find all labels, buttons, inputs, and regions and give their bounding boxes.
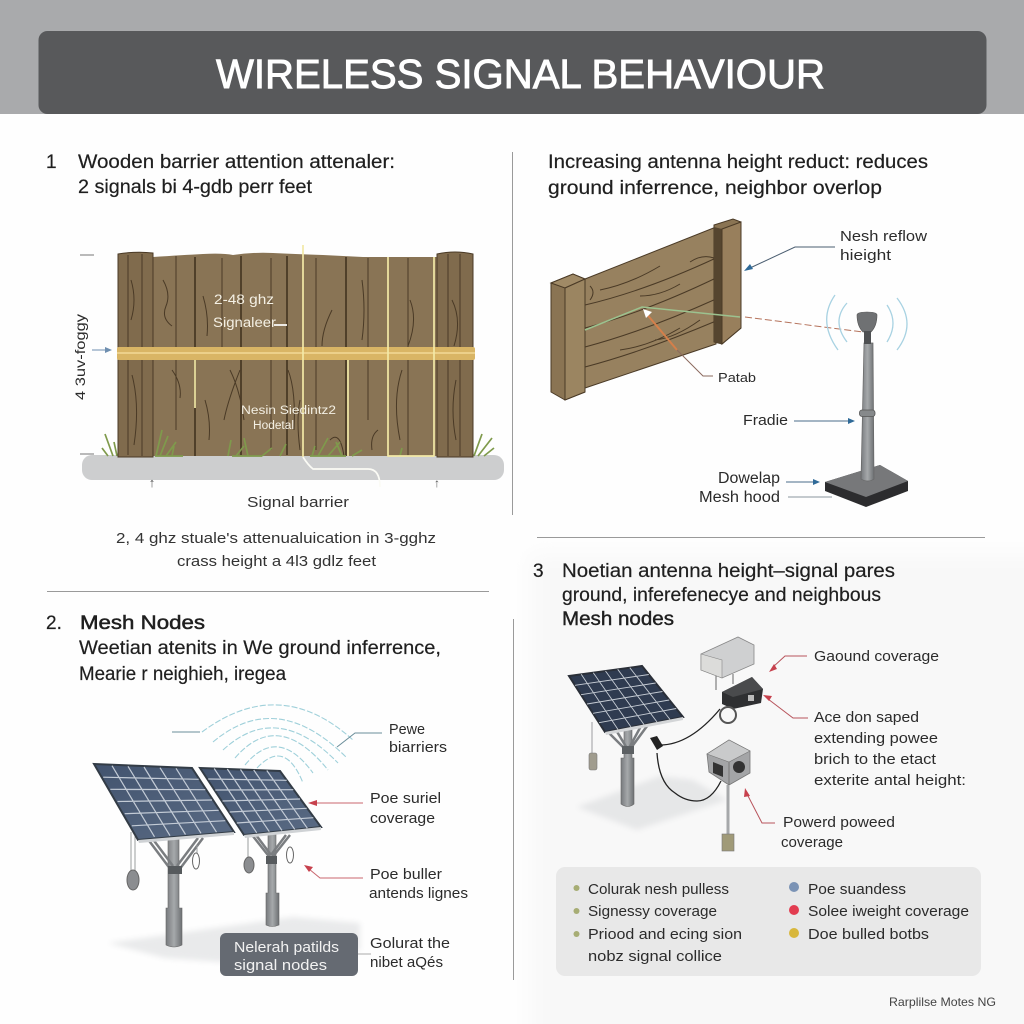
header band — [0, 0, 1024, 114]
right solar panel — [200, 768, 321, 835]
solar panel — [569, 666, 683, 732]
fence labels: 2-48 ghz — [214, 292, 274, 307]
fence illustration: ↑ — [149, 475, 155, 490]
section 4 heading — [533, 561, 895, 630]
solar power kit illustration: Ace don saped — [814, 709, 919, 726]
grass — [102, 430, 494, 456]
section 3 heading (lower left): Mearie r neighieh, iregea — [79, 664, 286, 685]
fence illustration: Nesin Siedintz2 — [241, 405, 336, 417]
twin solar node illustration: Poe suriel — [370, 791, 441, 807]
twin solar node illustration: Poe buller — [370, 867, 442, 883]
angled wall and antenna illustration: Fradie — [743, 412, 788, 429]
solar power kit illustration — [569, 637, 966, 851]
legend left column: nobz signal collice — [588, 948, 722, 965]
section 1 heading — [46, 152, 395, 198]
twin solar node illustration: coverage — [370, 811, 435, 827]
wall left post — [551, 274, 585, 400]
fence illustration: 4 3uv-foggy — [72, 314, 88, 400]
legend left column: Priood and ecing sion — [588, 926, 742, 943]
fence illustration: Signaleer — [213, 315, 277, 330]
twin solar node illustration: antends lignes — [369, 886, 468, 902]
wifi arcs — [202, 705, 353, 783]
legend left column — [574, 881, 742, 965]
red callouts — [773, 656, 807, 667]
twin solar node illustration: biarriers — [389, 740, 447, 756]
height dimension — [80, 255, 94, 454]
grey box — [701, 637, 754, 678]
wall right post — [714, 219, 741, 344]
signal paths — [585, 307, 740, 330]
dark label box: Nelerah patilds — [234, 939, 339, 956]
signal lines — [195, 245, 434, 487]
section 2 heading (top right): Increasing antenna height reduct: reduces — [548, 152, 928, 173]
left post — [118, 252, 153, 457]
wall — [585, 227, 716, 388]
solar power kit illustration: coverage — [781, 834, 843, 851]
callout arrow — [750, 247, 835, 268]
fence illustration: ↑ — [434, 476, 440, 490]
angled wall and antenna illustration: Dowelap — [718, 470, 780, 487]
section 1 heading: 2 signals bi 4-gdb perr feet — [78, 177, 313, 198]
legend panel — [556, 867, 981, 976]
node left pole — [166, 838, 182, 947]
ground strip — [82, 455, 504, 480]
antenna pole — [861, 343, 874, 481]
cables — [657, 709, 721, 801]
section 3 heading (lower left): Weetian atenits in We ground inferrence, — [79, 638, 441, 659]
section 3 heading (lower left): Mesh Nodes — [80, 613, 205, 634]
labels: Pewe — [389, 722, 425, 738]
dark label box — [220, 933, 358, 976]
labels: Gaound coverage — [814, 648, 939, 665]
twin solar node illustration: nibet aQés — [370, 955, 443, 971]
plank seams and wood grain — [163, 256, 414, 456]
footer note: Rarplilse Motes NG — [889, 995, 996, 1009]
fence planks — [153, 253, 437, 456]
angled wall and antenna illustration: Patab — [718, 370, 756, 385]
antenna base — [825, 465, 908, 507]
twin solar node illustration — [94, 705, 468, 976]
fence caption: crass height a 4l3 gdlz feet — [177, 553, 377, 570]
left solar panel — [94, 764, 234, 840]
fence illustration — [72, 245, 504, 490]
section 3 heading (lower left) — [46, 613, 441, 685]
fence caption: 2, 4 ghz stuale's attenualuication in 3-gghz — [116, 530, 436, 547]
junction cube — [707, 740, 750, 785]
legend right column: Doe bulled botbs — [808, 926, 929, 943]
solar power kit illustration: extending powee — [814, 730, 938, 747]
labels: Nesh reflow — [840, 228, 927, 245]
radio waves — [827, 295, 907, 350]
node right pole — [266, 834, 279, 926]
angled wall and antenna illustration — [551, 219, 927, 507]
legend right column: Solee iweight coverage — [808, 903, 969, 920]
yellow rail — [117, 347, 475, 360]
legend left column: Colurak nesh pulless — [588, 881, 729, 898]
angled wall and antenna illustration: Mesh hood — [699, 489, 780, 506]
red callouts — [315, 802, 363, 804]
dark label box: signal nodes — [234, 957, 327, 974]
title: WIRELESS SIGNAL BEHAVIOUR — [216, 51, 825, 97]
ground shadow — [577, 776, 727, 830]
pole and brackets — [621, 728, 634, 806]
section 2 heading (top right) — [548, 152, 928, 199]
legend left column: Signessy coverage — [588, 903, 717, 920]
section 2 heading (top right): ground inferrence, neighbor overlop — [548, 178, 882, 199]
section 4 heading: Mesh nodes — [562, 609, 674, 630]
section 4 heading: 3 — [533, 561, 544, 582]
fence caption — [116, 494, 436, 570]
section 4 heading: Noetian antenna height–signal pares — [562, 561, 895, 582]
fence caption: Signal barrier — [247, 494, 349, 511]
solar power kit illustration: exterite antal height: — [814, 772, 966, 789]
right post — [437, 252, 473, 457]
solar power kit illustration: Powerd poweed — [783, 814, 895, 831]
angled wall and antenna illustration: hieight — [840, 247, 892, 264]
legend right column — [789, 881, 969, 943]
twin solar node illustration: Golurat the — [370, 936, 450, 952]
section 4 heading: ground, inferefenecye and neighbous — [562, 585, 881, 606]
solar power kit illustration: brich to the etact — [814, 751, 937, 768]
section 1 heading: Wooden barrier attention attenaler: — [78, 152, 395, 173]
fence illustration: Hodetal — [253, 420, 294, 432]
dark power unit — [722, 677, 763, 709]
ground shadow — [108, 917, 360, 962]
legend right column: Poe suandess — [808, 881, 906, 898]
section 1 heading: 1 — [46, 152, 57, 173]
section 3 heading (lower left): 2. — [46, 613, 62, 634]
